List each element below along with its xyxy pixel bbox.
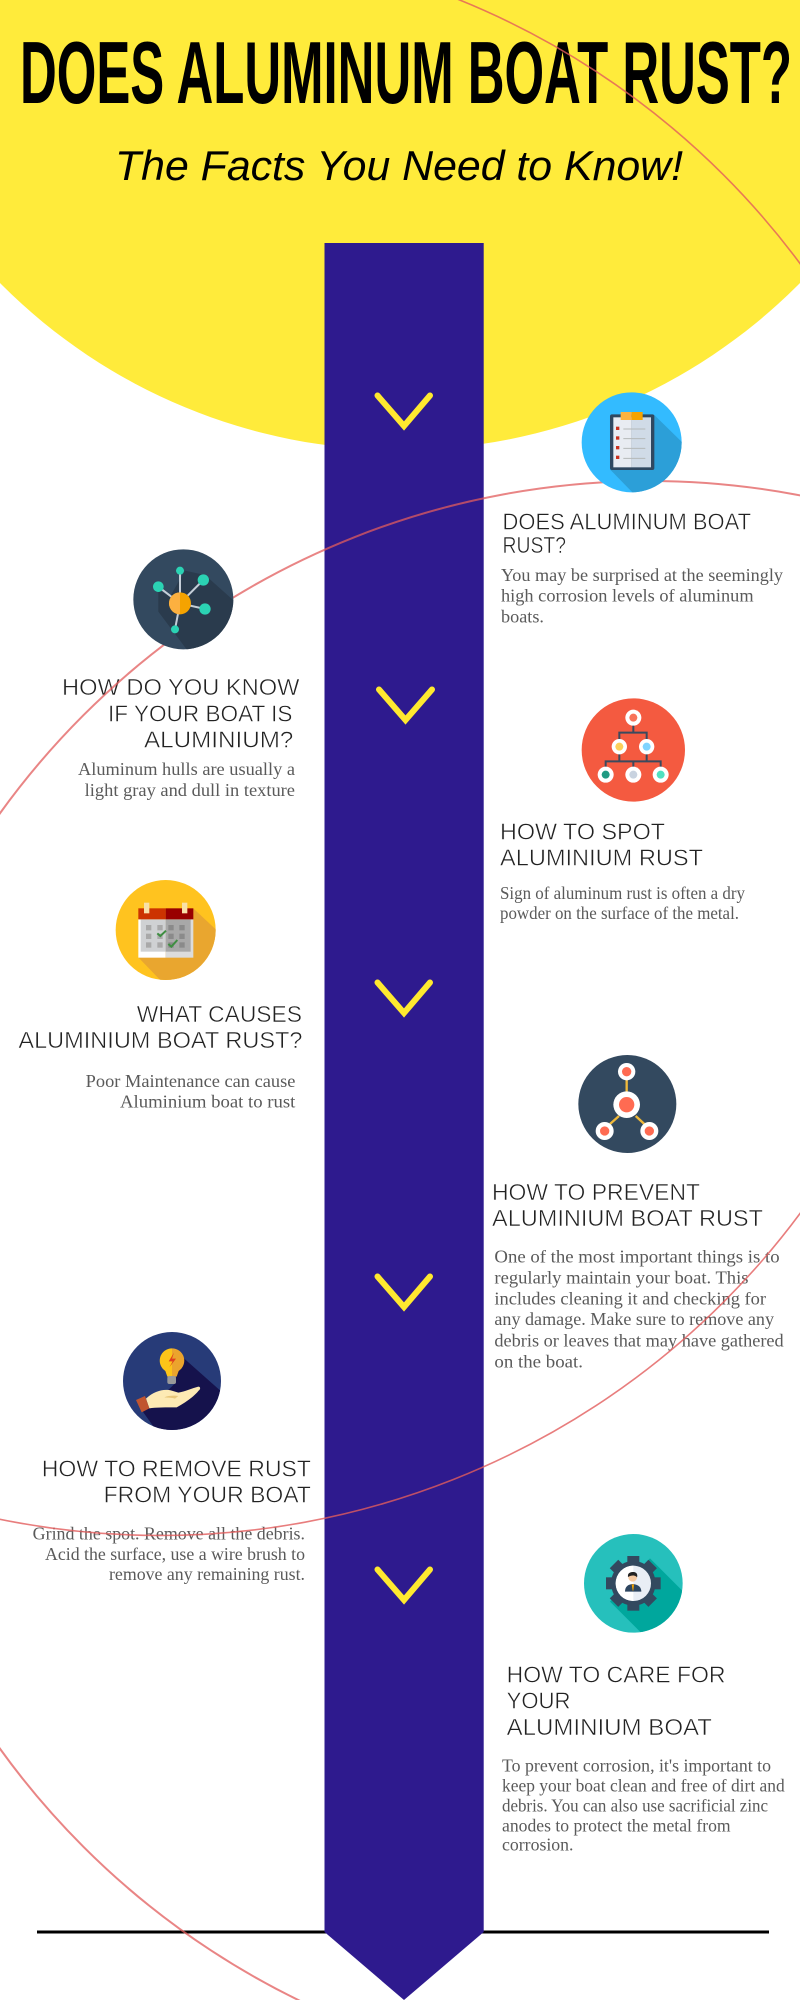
heading: HOW TO SPOT	[500, 818, 665, 844]
icon: molecule	[578, 1055, 676, 1153]
heading: HOW TO PREVENT	[492, 1179, 700, 1205]
body text: light gray and dull in texture	[85, 780, 295, 800]
heading: ALUMINIUM BOAT RUST	[492, 1205, 763, 1231]
body text: Aluminium boat to rust	[120, 1092, 296, 1112]
body text	[33, 1523, 305, 1584]
body text: powder on the surface of the metal.	[500, 903, 739, 923]
section: what causes	[18, 1001, 303, 1112]
body text: keep your boat clean and free of dirt and	[502, 1776, 785, 1796]
heading: ALUMINIUM RUST	[500, 845, 703, 871]
body text: Grind the spot. Remove all the debris.	[33, 1523, 305, 1543]
body text	[502, 1756, 785, 1855]
icon: gear with person	[584, 1534, 685, 1635]
central purple arrow banner	[324, 243, 484, 2000]
body text	[78, 759, 295, 800]
body text: any damage. Make sure to remove any	[494, 1309, 774, 1329]
body text: To prevent corrosion, it's important to	[502, 1756, 771, 1776]
heading	[42, 1456, 311, 1508]
body text	[494, 1247, 784, 1371]
icon: network nodes	[133, 549, 235, 652]
heading: WHAT CAUSES	[137, 1001, 302, 1027]
body text	[501, 565, 783, 627]
heading	[502, 508, 751, 558]
chevron 4	[378, 1276, 430, 1307]
body text: corrosion.	[502, 1835, 574, 1855]
heading: YOUR	[507, 1688, 570, 1714]
heading: IF YOUR BOAT IS	[108, 701, 292, 727]
icon: clipboard	[582, 392, 687, 493]
body text	[86, 1071, 296, 1112]
heading: ALUMINIUM BOAT RUST?	[18, 1027, 303, 1053]
body text: remove any remaining rust.	[109, 1564, 305, 1584]
heading: HOW TO CARE FOR	[507, 1662, 726, 1688]
heading: HOW DO YOU KNOW	[62, 674, 300, 700]
chevron 2	[379, 690, 432, 720]
heading: DOES ALUMINUM BOAT	[502, 508, 751, 534]
section: how do you know	[62, 674, 300, 800]
section: does aluminum boat rust	[501, 508, 783, 627]
heading: ALUMINIUM?	[144, 727, 293, 753]
body text: high corrosion levels of aluminum	[501, 586, 754, 606]
body text: regularly maintain your boat. This	[494, 1267, 749, 1287]
heading	[62, 674, 300, 753]
body text: Acid the surface, use a wire brush to	[45, 1544, 305, 1564]
body text	[500, 883, 745, 923]
body text: on the boat.	[494, 1351, 583, 1371]
body text: includes cleaning it and checking for	[494, 1288, 766, 1308]
body text: You may be surprised at the seemingly	[501, 565, 783, 585]
icon: hand with light bulb	[123, 1332, 223, 1433]
section: how to care	[502, 1662, 785, 1855]
bottom baseline rule	[37, 1930, 769, 1934]
chevron 1	[378, 396, 430, 426]
heading: HOW TO REMOVE RUST	[42, 1456, 311, 1482]
subtitle: The Facts You Need to Know!	[115, 142, 683, 189]
section: how to spot	[500, 818, 745, 923]
section: how to remove rust	[33, 1456, 311, 1584]
icon: calendar	[116, 880, 220, 983]
body text: debris or leaves that may have gathered	[494, 1331, 784, 1351]
heading	[492, 1179, 763, 1231]
icon: org chart	[582, 698, 685, 802]
chevron 3	[378, 982, 430, 1013]
body text: anodes to protect the metal from	[502, 1816, 731, 1836]
body text: debris. You can also use sacrificial zinc	[502, 1796, 768, 1816]
heading: RUST?	[502, 532, 566, 558]
decorative red ring upper	[0, 0, 800, 1536]
yellow header circle	[0, 0, 800, 450]
decorative red ring lower	[0, 481, 800, 2000]
heading: ALUMINIUM BOAT	[507, 1714, 712, 1740]
heading	[507, 1662, 726, 1740]
body text: One of the most important things is to	[494, 1247, 780, 1267]
chevrons down the banner	[378, 396, 432, 1600]
body text: Poor Maintenance can cause	[86, 1071, 296, 1091]
heading	[500, 818, 703, 871]
body text: Aluminum hulls are usually a	[78, 759, 295, 779]
section: how to prevent	[492, 1179, 784, 1371]
body text: boats.	[501, 607, 544, 627]
body text: Sign of aluminum rust is often a dry	[500, 883, 745, 903]
chevron 5	[378, 1570, 430, 1600]
heading: FROM YOUR BOAT	[104, 1482, 311, 1508]
heading	[18, 1001, 303, 1053]
